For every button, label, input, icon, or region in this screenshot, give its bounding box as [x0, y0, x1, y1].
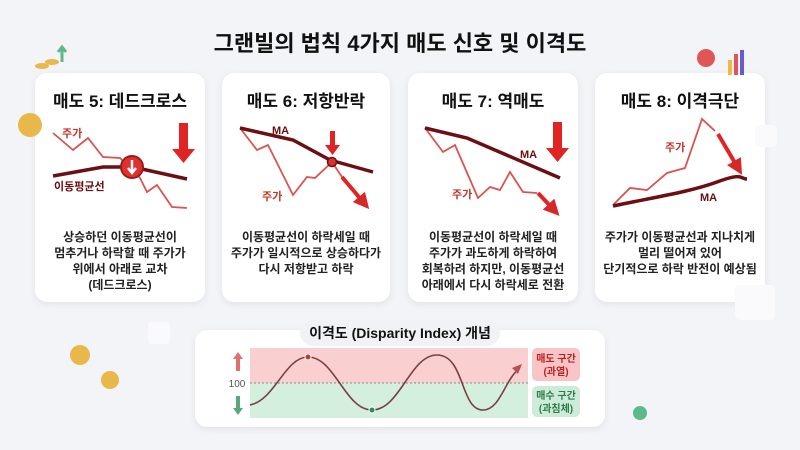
zone label: buy [532, 386, 580, 417]
bottom panel [195, 330, 605, 427]
chart: card 8: MA [700, 192, 717, 204]
card: 매도 8: 멀리 떨어져 있어 [638, 246, 722, 260]
card: 매도 7: 매도 7: 역매도 [442, 92, 544, 111]
panel tab title: 이격도 (Disparity Index) 개념 [309, 325, 491, 341]
card: 매도 8 [595, 73, 765, 302]
chart: card 6: 주가 [262, 189, 282, 203]
card: 매도 5 [35, 73, 205, 302]
chart: card 7 [425, 122, 569, 210]
card: 매도 7: 회복하려 하지만, 이동평균선 [422, 262, 564, 276]
chart: card 8: 주가 [665, 140, 685, 154]
zone label: buy: 매수 구간 [536, 389, 576, 402]
decorative icons [18, 47, 777, 420]
card: 매도 5: 매도 5: 데드크로스 [53, 92, 187, 111]
card: 매도 7: 이동평균선이 하락세일 때 [429, 230, 557, 244]
chart: card 6 [240, 125, 373, 203]
card: 매도 8: 주가가 이동평균선과 지나치게 [605, 230, 755, 244]
chart: card 7: MA [520, 149, 537, 161]
chart: card 8 [613, 119, 747, 206]
card: 매도 7 [408, 73, 578, 302]
card: 매도 6: 이동평균선이 하락세일 때 [242, 230, 370, 244]
panel tab title [300, 320, 500, 346]
zone label: buy: (과침체) [539, 402, 573, 415]
zone label: sell: (과열) [543, 365, 569, 378]
card: 매도 8: 단기적으로 하락 반전이 예상됨 [603, 262, 757, 276]
card: 매도 6 [222, 73, 390, 302]
title: 그랜빌의 법칙 4가지 매도 신호 및 이격도 [214, 31, 586, 56]
card: 매도 5: (데드크로스) [88, 278, 152, 292]
chart: card 6: MA [272, 125, 289, 137]
card: 매도 6: 다시 저항받고 하락 [258, 262, 354, 276]
disparity chart: 100 [229, 379, 246, 390]
chart: card 5 [53, 123, 195, 208]
card: 매도 6: 매도 6: 저항반락 [247, 92, 365, 111]
zone label: sell: 매도 구간 [536, 352, 576, 365]
zone label: sell [532, 348, 580, 381]
disparity chart [229, 348, 528, 418]
card: 매도 5: 상승하던 이동평균선이 [63, 230, 177, 244]
chart: card 5: 이동평균선 [54, 180, 105, 193]
card: 매도 7: 주가가 과도하게 하락하여 [429, 246, 557, 260]
card: 매도 6: 주가가 일시적으로 상승하다가 [231, 246, 381, 260]
card: 매도 7: 아래에서 다시 하락세로 전환 [422, 278, 564, 292]
card: 매도 8: 매도 8: 이격극단 [621, 92, 739, 111]
card: 매도 5: 멈추거나 하락할 때 주가가 [54, 246, 186, 260]
chart: card 7: 주가 [452, 187, 472, 201]
chart: card 5: 주가 [62, 126, 82, 140]
card: 매도 5: 위에서 아래로 교차 [72, 262, 168, 276]
